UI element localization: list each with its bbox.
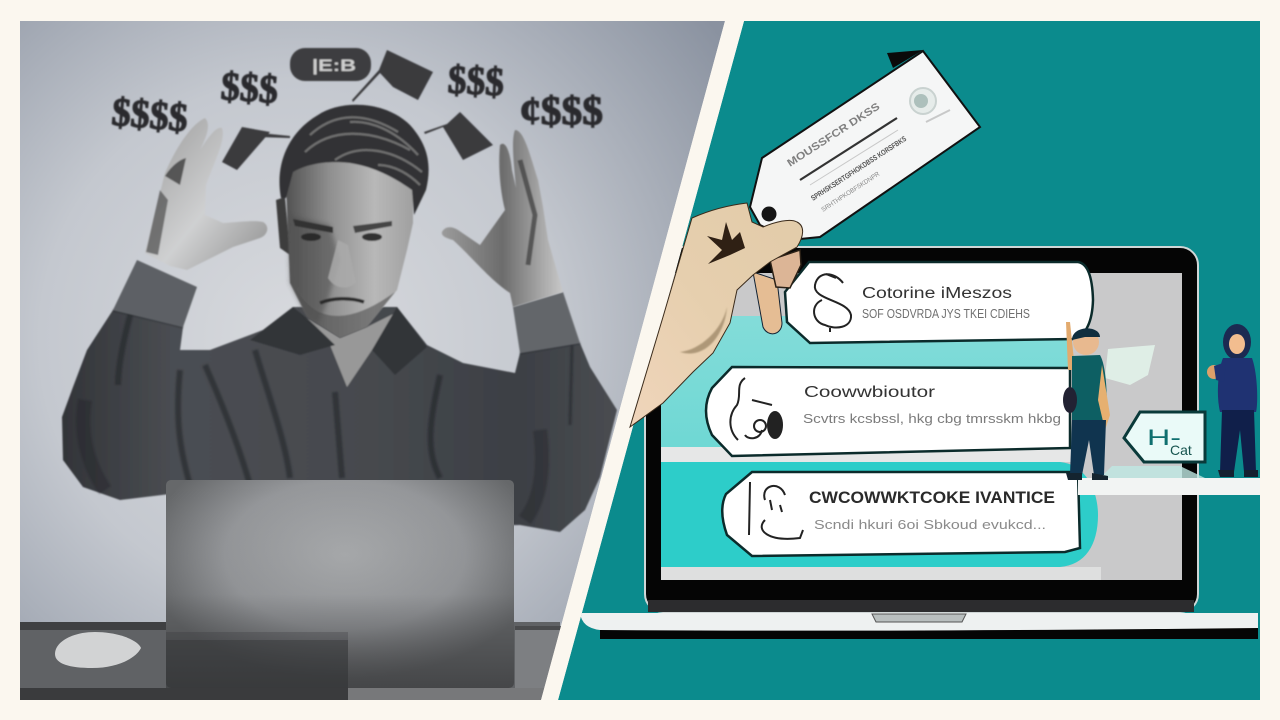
flag tag lower right [424, 112, 493, 160]
dollar signs right: $$$ [447, 57, 505, 104]
card 1 heading: Cotorine iMeszos [862, 285, 1012, 302]
person in teal [1063, 322, 1110, 480]
lower grey band [661, 567, 1101, 580]
middle fingers [770, 250, 801, 288]
open collar and neck [307, 312, 397, 387]
small price tag: Cat [1170, 442, 1192, 458]
laptop hinge [648, 600, 1194, 612]
shoes [1066, 473, 1108, 480]
person in blue [1207, 324, 1258, 477]
eyebrows [293, 219, 333, 233]
shelf stripes [1100, 466, 1205, 478]
torso [1072, 355, 1107, 422]
laptop base shadow [600, 628, 1258, 639]
hair [279, 105, 429, 215]
small price tag [1124, 412, 1205, 462]
raised arm [1066, 322, 1075, 370]
mouse [55, 632, 141, 668]
tag rule [800, 118, 897, 180]
teal band [661, 462, 1098, 567]
grey band [661, 447, 1081, 462]
panel: teal price tag and laptop [555, 21, 1260, 701]
man's torso and arms [62, 260, 617, 532]
light teal band [661, 316, 1068, 447]
flag tag lower left [222, 127, 290, 170]
card 2 body: Scvtrs kcsbssl, hkg cbg tmrsskm hkbg [803, 412, 1061, 426]
screen laptop [580, 247, 1258, 639]
ear [276, 197, 290, 255]
hood [1223, 324, 1251, 360]
wall background [20, 21, 725, 629]
right hand [442, 130, 563, 307]
legs [1070, 420, 1106, 475]
shoes [1218, 470, 1258, 477]
money symbols above head [110, 48, 603, 170]
tag body [750, 51, 980, 240]
nose [328, 240, 349, 287]
white shelf [1078, 478, 1260, 495]
arm [1098, 365, 1110, 430]
face shape [285, 160, 413, 338]
head [1073, 329, 1099, 355]
tag eyelet [762, 206, 776, 222]
tag pale rule [810, 130, 898, 185]
price label pill: |E:B [312, 56, 356, 75]
palm and forearm [630, 203, 803, 427]
hand holding tag [630, 203, 803, 427]
divider strip [541, 21, 744, 700]
left hand [145, 118, 267, 270]
hand [1207, 365, 1221, 379]
backpack [1063, 387, 1077, 413]
table [20, 622, 565, 700]
tag fold [887, 50, 923, 68]
price tag large [750, 50, 980, 240]
dollar signs far right: ¢$$$ [520, 88, 603, 133]
small price tag: H- [1147, 425, 1181, 450]
card 3 icon [749, 482, 803, 539]
index finger [753, 272, 782, 334]
tag seal [910, 88, 950, 122]
shadow side [288, 215, 340, 325]
card 2 [706, 367, 1070, 456]
knuckle shadow [707, 222, 745, 264]
stubble [296, 290, 395, 338]
face [276, 105, 429, 338]
pale note [1105, 345, 1155, 385]
card 3 body: Scndi hkuri 6oi Sbkoud evukcd... [814, 517, 1046, 532]
shirt folds [83, 310, 580, 520]
dollar signs left: $$$ [220, 63, 280, 112]
laptop lid [645, 247, 1198, 612]
laptop screen [661, 273, 1182, 580]
forearm shadow [680, 307, 727, 354]
laptop base [580, 613, 1258, 631]
flag tag top right [352, 50, 433, 102]
teal background [555, 21, 1260, 701]
laptop notch [872, 614, 966, 622]
face [1229, 334, 1245, 354]
card 1 icon [814, 274, 851, 332]
eyes [301, 233, 321, 241]
card 2 icon [730, 378, 782, 440]
panel: frustrated man [20, 21, 730, 701]
card 1 body: SOF OSDVRDA JYS TKEI CDIEHS [862, 307, 1030, 321]
card 3 [722, 472, 1080, 556]
torso [1218, 358, 1257, 412]
mouth [320, 299, 364, 303]
dollar signs far left: $$$$ [110, 89, 190, 140]
laptop [166, 480, 514, 688]
card 3 heading: CWCOWWKTCOKE IVANTICE [809, 489, 1055, 507]
tag heading: MOUSSFCR DKSS [785, 101, 882, 170]
legs [1220, 410, 1256, 472]
tag line: SPRHSKSERTGFHOKDBSS KORSFBKS [809, 134, 908, 203]
shirt collar [250, 307, 427, 375]
shirt cuffs [113, 260, 197, 327]
card 2 heading: Coowwbioutor [804, 384, 935, 401]
tag line short: SRHTHPKOBFSKDNPR [820, 171, 881, 214]
card 1 [785, 262, 1093, 343]
price label pill [290, 48, 371, 81]
